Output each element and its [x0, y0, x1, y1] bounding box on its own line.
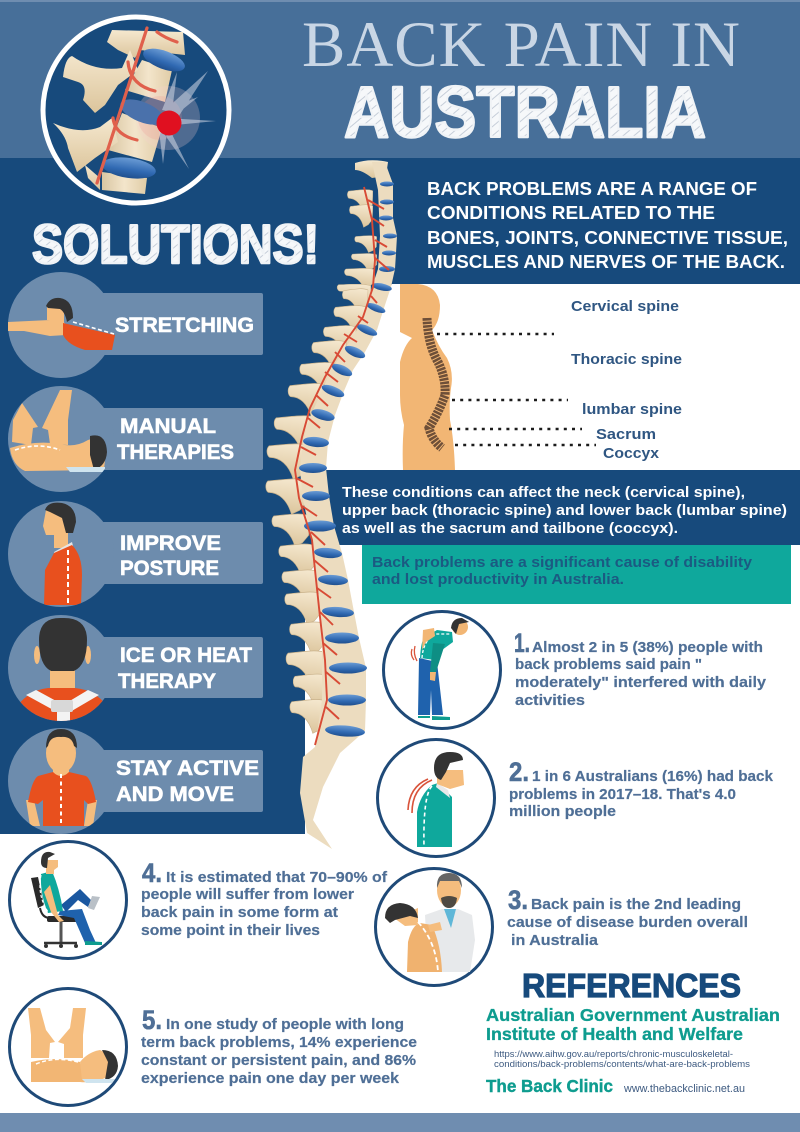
spinal nerve — [295, 187, 389, 745]
spine vertebral body — [300, 162, 397, 849]
intro text: BONES, JOINTS, CONNECTIVE TISSUE, — [427, 227, 788, 248]
label: stay active and move: AND MOVE — [116, 783, 234, 806]
spine region labels: Sacrum — [596, 426, 656, 443]
vertebral wings — [263, 160, 388, 735]
label: manual therapies — [117, 415, 234, 464]
panel: solution stretching — [8, 272, 263, 378]
stat 1 text: back problems said pain " — [515, 657, 702, 673]
icon: posture person — [43, 503, 82, 606]
stat 2 text — [509, 757, 774, 820]
intro text: CONDITIONS RELATED TO THE — [427, 202, 715, 223]
stat 4 text: back pain in some form at — [141, 905, 338, 921]
stat 4 — [10, 842, 387, 958]
stat 2 — [378, 740, 774, 856]
panel: solution ice or heat — [8, 615, 263, 725]
label: stretching: STRETCHING — [115, 314, 254, 337]
clinic url: www.thebackclinic.net.au — [623, 1083, 745, 1095]
illustration: anatomical spine — [263, 160, 397, 849]
icon: doctor examining patient — [385, 873, 475, 972]
dotted leader lines — [437, 334, 596, 445]
stat 5 text: term back problems, 14% experience — [141, 1035, 417, 1051]
icon: body silhouette with spine — [400, 284, 455, 470]
source name: Australian Government Australian — [486, 1005, 780, 1025]
panel: solution manual therapies — [8, 386, 263, 492]
panel: solution stay active — [8, 728, 263, 834]
stat 1 — [384, 612, 766, 728]
stat 2 text: problems in 2017–18. That's 4.0 — [509, 787, 736, 803]
icon: seated man in chair — [31, 852, 102, 948]
icon: vertebrae — [53, 30, 188, 194]
icon: man bending with back pain — [411, 618, 469, 720]
stat 3 text: in Australia — [511, 933, 599, 949]
references heading: REFERENCES — [522, 967, 741, 1004]
stat 3 text: cause of disease burden overall — [507, 915, 748, 931]
stat 4 text: people will suffer from lower — [141, 887, 354, 903]
stat 1 text: 1. — [514, 628, 530, 658]
stat 4 text: some point in their lives — [141, 923, 320, 939]
bottom bar — [0, 1113, 800, 1132]
stat 5 text: In one study of people with long — [166, 1017, 404, 1033]
stat 3 text: Back pain is the 2nd leading — [531, 897, 741, 913]
stat 2 text: million people — [509, 804, 616, 820]
label: improve posture: IMPROVE — [120, 532, 221, 555]
icon: back of head with shoulders — [20, 618, 102, 721]
icon: herniated disc — [120, 99, 162, 125]
teal callout: Back problems are a significant cause of disability — [372, 554, 753, 571]
stat 2 text: 1 in 6 Australians (16%) had back — [532, 769, 774, 785]
conditions text band — [342, 484, 787, 537]
stat 5 text: constant or persistent pain, and 86% — [141, 1053, 416, 1069]
stat 5 text: experience pain one day per week — [141, 1071, 400, 1087]
references section — [486, 967, 780, 1096]
teal callout — [362, 545, 791, 604]
icon: man with upper back pain — [408, 752, 464, 847]
panel: solution improve posture — [8, 501, 263, 607]
source name: Institute of Health and Welfare — [486, 1024, 743, 1044]
navy background panel — [0, 158, 800, 834]
label: stay active and move — [116, 757, 259, 806]
icon: nerve — [97, 28, 177, 183]
icon: pain rays — [136, 71, 216, 169]
intro text: BACK PROBLEMS ARE A RANGE OF — [427, 178, 757, 199]
icon: massage therapy — [28, 1008, 118, 1083]
icon: stretching person — [8, 298, 115, 350]
stat 1 text: Almost 2 in 5 (38%) people with — [532, 640, 763, 656]
label: manual therapies: MANUAL — [120, 415, 216, 438]
medallion: spine injury — [43, 17, 229, 203]
conditions text band: upper back (thoracic spine) and lower back (lumbar spine) — [342, 502, 787, 519]
source name — [486, 1005, 780, 1044]
stat 4 text: 4. — [142, 858, 162, 888]
clinic name: The Back Clinic — [486, 1076, 613, 1096]
stat 5 — [10, 988, 417, 1106]
source url: https://www.aihw.gov.au/reports/chronic-musculoskeletal- — [494, 1049, 733, 1059]
label: ice or heat therapy: THERAPY — [118, 670, 216, 693]
label: manual therapies: THERAPIES — [117, 441, 234, 464]
label: ice or heat therapy — [118, 644, 252, 693]
spine region labels: Cervical spine — [571, 298, 679, 315]
stat 1 text: moderately" interfered with daily — [515, 675, 766, 691]
stat 5 text: 5. — [142, 1005, 162, 1035]
header banner — [0, 0, 800, 159]
stat 3 text — [507, 885, 748, 949]
stat 5 text — [141, 1005, 417, 1087]
spine region labels — [571, 298, 682, 462]
stat 1 text: activities — [515, 693, 585, 709]
spine region labels: Thoracic spine — [571, 351, 682, 368]
icon: front-facing person — [26, 729, 97, 826]
stat 4 text — [141, 858, 387, 939]
source url: conditions/back-problems/contents/what-are-back-problems — [494, 1059, 751, 1069]
teal callout: and lost productivity in Australia. — [372, 571, 624, 588]
label: improve posture: POSTURE — [120, 557, 219, 580]
label: ice or heat therapy: ICE OR HEAT — [120, 644, 252, 667]
conditions text band: These conditions can affect the neck (cervical spine), — [342, 484, 745, 501]
title: australia: AUSTRALIA — [344, 73, 706, 153]
stat 1 text — [514, 628, 766, 709]
icon: inflamed disc — [156, 110, 182, 136]
label: stay active and move: STAY ACTIVE — [116, 757, 259, 780]
stat 4 text: It is estimated that 70–90% of — [166, 870, 387, 886]
label: improve posture — [120, 532, 221, 580]
intro text — [427, 178, 788, 272]
spine region labels: Coccyx — [603, 445, 660, 462]
spine region labels: lumbar spine — [582, 401, 682, 418]
stat 2 text: 2. — [509, 757, 529, 787]
stat 3 text: 3. — [508, 885, 528, 915]
conditions text band: as well as the sacrum and tailbone (coccyx). — [342, 520, 678, 537]
stat 3 — [376, 868, 748, 986]
intervertebral discs — [299, 182, 397, 738]
heading: solutions: SOLUTIONS! — [32, 213, 319, 275]
source url — [494, 1049, 751, 1069]
title: back pain in: BACK PAIN IN — [302, 9, 740, 81]
intro text: MUSCLES AND NERVES OF THE BACK. — [427, 251, 785, 272]
icon: manual therapy — [10, 390, 107, 472]
